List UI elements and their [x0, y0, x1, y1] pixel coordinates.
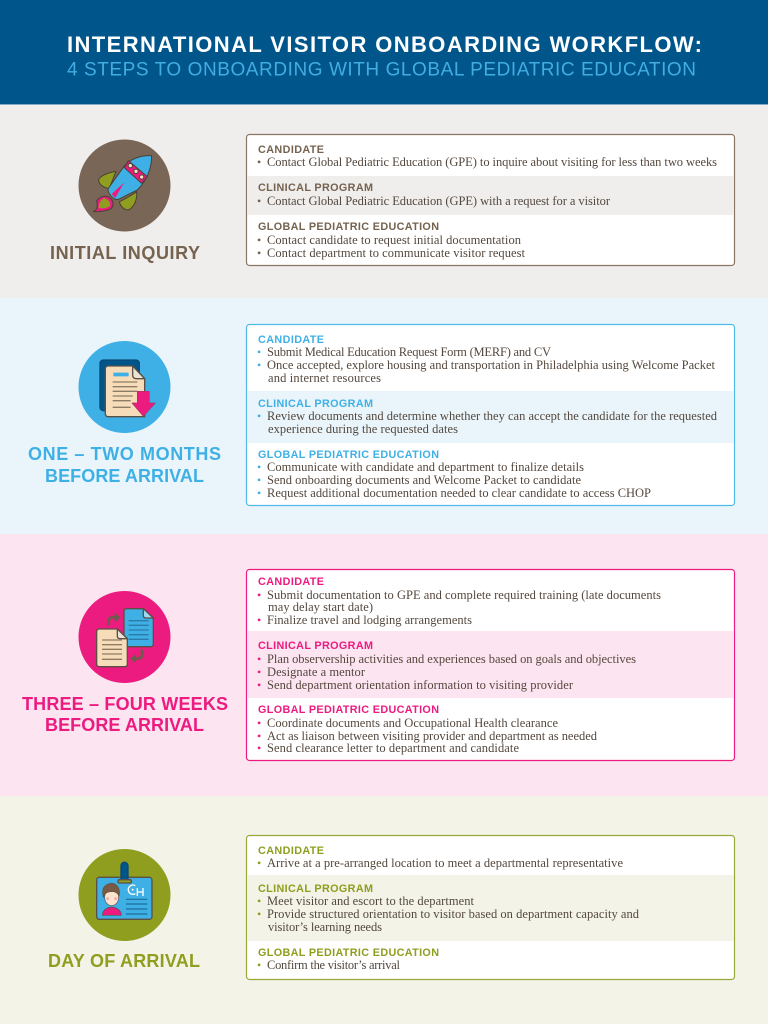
label: one to two months before arrival	[28, 444, 221, 486]
role: clinical program: CLINICAL PROGRAM	[258, 182, 373, 194]
role: clinical program: Review documents and determine whether they can accept the candidate for the requested	[267, 409, 718, 423]
label: three to four weeks before arrival: THREE – FOUR WEEKS	[22, 694, 228, 714]
header banner	[0, 0, 768, 104]
section: initial inquiry	[0, 105, 768, 298]
role: global pediatric education: GLOBAL PEDIATRIC EDUCATION	[258, 221, 439, 233]
label: one to two months before arrival: BEFORE ARRIVAL	[45, 466, 204, 486]
role: candidate: CANDIDATE	[258, 576, 324, 588]
role: clinical program	[257, 398, 718, 436]
icon: document download	[78, 341, 170, 433]
role: candidate	[257, 144, 717, 169]
role: clinical program: •	[257, 907, 261, 921]
role: candidate: CANDIDATE	[258, 845, 324, 857]
role: global pediatric education: Send clearance letter to department and candidate	[267, 741, 519, 755]
role: candidate: CANDIDATE	[258, 334, 324, 346]
role: global pediatric education: Confirm the visitor’s arrival	[267, 958, 401, 972]
role: candidate: •	[257, 613, 261, 627]
role: candidate: •	[257, 588, 261, 602]
role: candidate: may delay start date)	[268, 600, 373, 614]
role: candidate	[257, 576, 661, 627]
role: clinical program: Plan observership activities and experiences based on goals and objectives	[267, 652, 636, 666]
role: candidate: Submit documentation to GPE and complete required training (late documents	[267, 588, 661, 602]
role: candidate: and internet resources	[268, 371, 381, 385]
label: initial inquiry: INITIAL INQUIRY	[50, 243, 200, 263]
icon: exchanging documents	[78, 591, 170, 683]
panel: initial inquiry roles	[246, 134, 734, 266]
role: global pediatric education: •	[257, 246, 261, 260]
role: candidate: •	[257, 358, 261, 372]
role: candidate: Submit Medical Education Request Form (MERF) and CV	[267, 345, 551, 359]
role: global pediatric education: •	[257, 741, 261, 755]
role: global pediatric education	[257, 221, 526, 260]
role: clinical program: Designate a mentor	[267, 665, 366, 679]
role: candidate: •	[257, 155, 261, 169]
role: clinical program: •	[257, 665, 261, 679]
role: clinical program	[257, 883, 640, 934]
role: clinical program: Contact Global Pediatric Education (GPE) with a request for a visitor	[267, 194, 611, 208]
panel: three to four weeks roles	[246, 570, 734, 760]
role: global pediatric education: •	[257, 473, 261, 487]
role: clinical program: CLINICAL PROGRAM	[258, 398, 373, 410]
role: global pediatric education: •	[257, 958, 261, 972]
role: global pediatric education	[257, 449, 651, 500]
role: clinical program: Send department orientation information to visiting provider	[267, 678, 574, 692]
role: candidate: •	[257, 856, 261, 870]
title: INTERNATIONAL VISITOR ONBOARDING WORKFLOW:	[67, 32, 702, 57]
role: global pediatric education: •	[257, 460, 261, 474]
icon: rocket	[78, 140, 170, 232]
role: global pediatric education: •	[257, 486, 261, 500]
role: global pediatric education: Communicate with candidate and department to finalize details	[267, 460, 584, 474]
panel: one to two months roles	[246, 324, 734, 506]
section: day of arrival	[0, 796, 768, 1024]
role: candidate: CANDIDATE	[258, 144, 324, 156]
role: global pediatric education: Coordinate documents and Occupational Health clearance	[267, 716, 558, 730]
role: clinical program: CLINICAL PROGRAM	[258, 883, 373, 895]
section: one to two months before arrival	[0, 298, 768, 534]
role: global pediatric education: •	[257, 716, 261, 730]
role: global pediatric education: •	[257, 729, 261, 743]
role: global pediatric education: GLOBAL PEDIATRIC EDUCATION	[258, 704, 439, 716]
role: clinical program: experience during the requested dates	[268, 422, 458, 436]
role: global pediatric education: Contact department to communicate visitor request	[267, 246, 526, 260]
role: global pediatric education: Send onboarding documents and Welcome Packet to candidate	[267, 473, 581, 487]
role: clinical program: •	[257, 194, 261, 208]
role: clinical program	[257, 640, 636, 692]
role: candidate: Arrive at a pre-arranged location to meet a departmental representative	[267, 856, 623, 870]
role: clinical program: •	[257, 678, 261, 692]
role: global pediatric education: GLOBAL PEDIATRIC EDUCATION	[258, 449, 439, 461]
label: day of arrival: DAY OF ARRIVAL	[48, 951, 200, 971]
subtitle: 4 STEPS TO ONBOARDING WITH GLOBAL PEDIATRIC EDUCATION	[67, 60, 696, 80]
panel: day of arrival roles	[246, 836, 734, 980]
role: clinical program: •	[257, 894, 261, 908]
label: three to four weeks before arrival: BEFORE ARRIVAL	[45, 715, 204, 735]
role: candidate: Contact Global Pediatric Education (GPE) to inquire about visiting for less than two weeks	[267, 155, 717, 169]
role: candidate: Once accepted, explore housing and transportation in Philadelphia using Welcome Packet	[267, 358, 716, 372]
label: three to four weeks before arrival	[22, 694, 228, 735]
section: three to four weeks before arrival	[0, 534, 768, 796]
role: global pediatric education: Act as liaison between visiting provider and department as needed	[267, 729, 598, 743]
role: clinical program: Meet visitor and escort to the department	[267, 894, 475, 908]
role: clinical program	[257, 182, 611, 208]
role: global pediatric education: Request additional documentation needed to clear candidate to access CHOP	[267, 486, 651, 500]
label: one to two months before arrival: ONE – TWO MONTHS	[28, 444, 221, 464]
role: clinical program: •	[257, 652, 261, 666]
role: global pediatric education: •	[257, 233, 261, 247]
role: clinical program: •	[257, 409, 261, 423]
role: clinical program: Provide structured orientation to visitor based on department capacity and	[267, 907, 640, 921]
role: clinical program: visitor’s learning needs	[268, 920, 382, 934]
role: candidate	[257, 334, 716, 385]
role: global pediatric education	[257, 947, 439, 972]
icon: id badge	[78, 849, 170, 941]
role: candidate	[257, 845, 623, 870]
role: candidate: •	[257, 345, 261, 359]
role: global pediatric education	[257, 704, 598, 755]
role: candidate: Finalize travel and lodging arrangements	[267, 613, 472, 627]
role: global pediatric education: Contact candidate to request initial documentation	[267, 233, 522, 247]
role: global pediatric education: GLOBAL PEDIATRIC EDUCATION	[258, 947, 439, 959]
role: clinical program: CLINICAL PROGRAM	[258, 640, 373, 652]
